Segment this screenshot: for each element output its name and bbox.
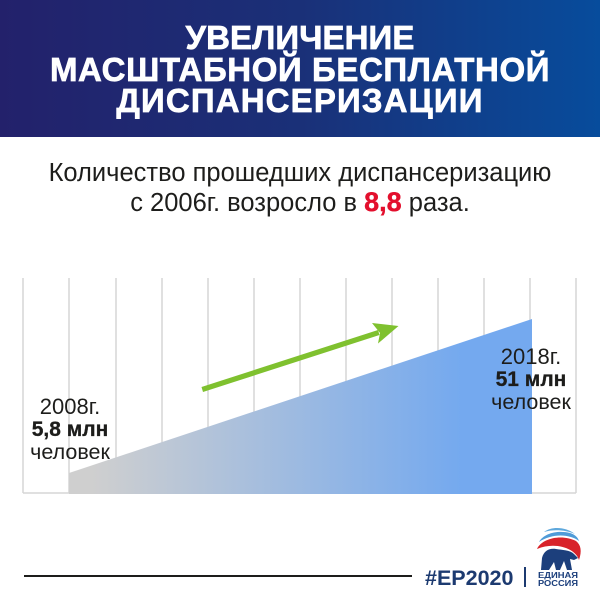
divider bar (524, 567, 526, 587)
label: 2018: 51 млн (496, 368, 566, 391)
subtitle text: Количество прошедших диспансеризацию (49, 159, 551, 187)
label: 2008: человек (30, 440, 110, 464)
logo: Единая Россия (537, 528, 581, 588)
title (50, 19, 550, 119)
header banner (0, 0, 600, 137)
logo: Единая Россия: РОССИЯ (538, 579, 578, 588)
label: 2008: 5,8 млн (32, 418, 108, 441)
label: 2018 (491, 344, 571, 414)
label: 2018: 2018г. (501, 344, 561, 369)
logo: Единая Россия: ЕДИНАЯ (538, 571, 578, 580)
label: 2018: человек (491, 390, 571, 414)
label: 2008 (30, 394, 110, 464)
hashtag: #ЕР2020 (425, 566, 513, 590)
title: УВЕЛИЧЕНИЕ (185, 19, 414, 56)
title: ДИСПАНСЕРИЗАЦИИ (116, 82, 484, 119)
subtitle text: с 2006г. возросло в 8,8 раза. (130, 187, 470, 217)
subtitle text (49, 159, 551, 217)
title: МАСШТАБНОЙ БЕСПЛАТНОЙ (50, 50, 550, 88)
label: 2008: 2008г. (40, 394, 100, 419)
footer line (24, 575, 412, 577)
